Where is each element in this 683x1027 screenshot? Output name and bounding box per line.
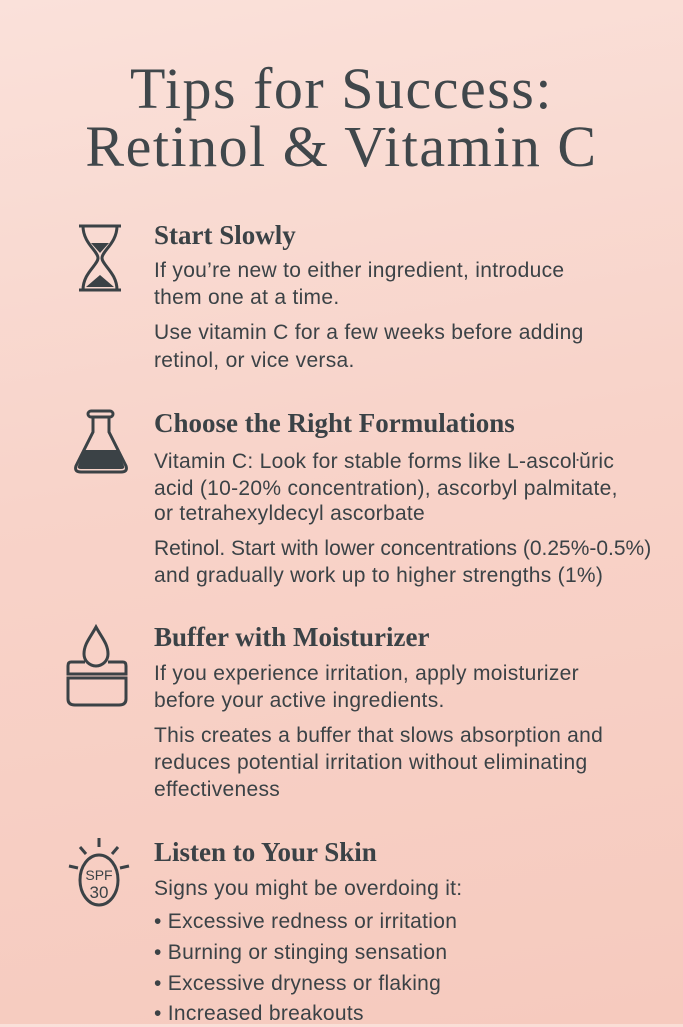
section: formulations	[154, 408, 651, 587]
section: start slowly: Start Slowly	[154, 220, 296, 250]
icon: SPF sun: SPF	[85, 867, 113, 883]
section: formulations: acid (10-20% concentration), ascorbyl palmitate,	[154, 477, 618, 500]
section: listen to your skin: • Burning or stinging sensation	[154, 941, 447, 964]
section: formulations: Vitamin C: Look for stable forms like L-ascoŀŭric	[154, 450, 614, 473]
section: start slowly	[154, 220, 584, 372]
section: listen to your skin: Listen to Your Skin	[154, 837, 377, 867]
section: listen to your skin: • Excessive dryness or flaking	[154, 972, 441, 995]
section: buffer: This creates a buffer that slows absorption and	[154, 724, 603, 747]
title: Tips for Success:	[130, 56, 553, 121]
section: buffer: reduces potential irritation without eliminating	[154, 751, 587, 774]
section: formulations: Retinol. Start with lower concentrations (0.25%-0.5%)	[154, 537, 651, 560]
section: buffer: effectiveness	[154, 778, 280, 801]
section: formulations: or tetrahexyldecyl ascorbate	[154, 502, 425, 525]
section: buffer: before your active ingredients.	[154, 689, 445, 712]
section: start slowly: retinol, or vice versa.	[154, 349, 355, 372]
section: listen to your skin	[154, 837, 462, 1025]
title	[85, 56, 598, 179]
section: formulations: and gradually work up to higher strengths (1%)	[154, 564, 603, 587]
icon: drop with jar	[66, 624, 128, 706]
section: listen to your skin: Signs you might be overdoing it:	[154, 877, 462, 900]
section: listen to your skin: • Excessive redness or irritation	[154, 910, 457, 933]
section: buffer: If you experience irritation, apply moisturizer	[154, 662, 579, 685]
title: Retinol & Vitamin C	[85, 114, 598, 179]
section: start slowly: them one at a time.	[154, 286, 339, 309]
icon: flask	[74, 410, 128, 474]
icon: hourglass	[79, 224, 121, 292]
icon: SPF sun: 30	[90, 883, 108, 902]
section: listen to your skin: • Increased breakouts	[154, 1002, 364, 1025]
icon: SPF sun	[68, 838, 130, 906]
section: start slowly: Use vitamin C for a few weeks before adding	[154, 321, 584, 344]
section: start slowly: If you’re new to either ingredient, introduce	[154, 259, 564, 282]
section: buffer: Buffer with Moisturizer	[154, 622, 429, 652]
section: buffer	[154, 622, 603, 801]
section: formulations: Choose the Right Formulations	[154, 408, 515, 438]
